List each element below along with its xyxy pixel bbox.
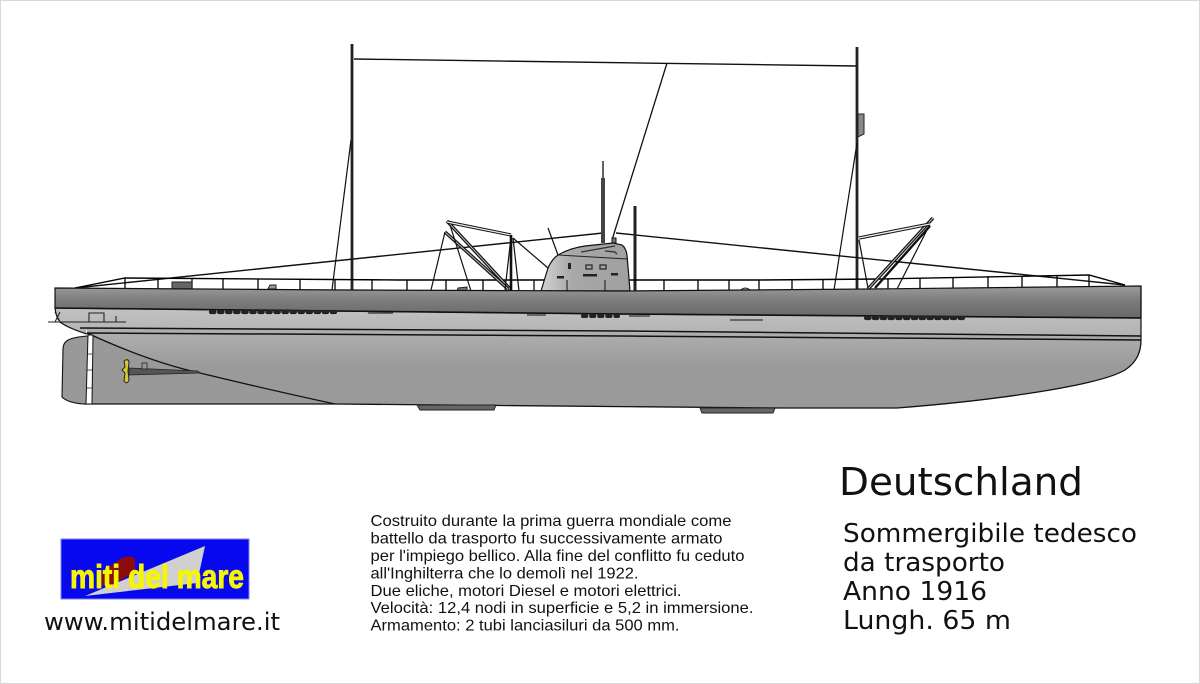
logo: miti del mare <box>61 539 249 599</box>
aft crane <box>859 218 933 289</box>
deck railing <box>75 275 1125 291</box>
lower hull <box>87 328 1141 408</box>
description text: Due eliche, motori Diesel e motori elettrici. <box>370 583 682 600</box>
icon: propeller <box>122 360 129 383</box>
logo: miti del mare: miti del mare <box>70 558 244 595</box>
rigging and masts <box>75 44 1125 291</box>
description text <box>370 513 754 634</box>
website address: www.mitidelmare.it <box>44 608 280 636</box>
portholes aft <box>866 316 963 320</box>
description text: all'Inghilterra che lo demolì nel 1922. <box>370 566 638 582</box>
hull lines <box>55 286 1141 340</box>
keel fins <box>417 405 775 413</box>
rudder post <box>83 335 98 404</box>
description text: per l'impiego bellico. Alla fine del conflitto fu ceduto <box>370 548 745 565</box>
light band <box>55 308 1141 336</box>
conning tower <box>534 238 630 291</box>
upper hull band <box>55 286 1141 318</box>
bow fittings <box>48 312 126 322</box>
title: Deutschland <box>839 460 1083 504</box>
portholes midships <box>583 314 618 318</box>
forward crane <box>431 221 548 291</box>
description text: Velocità: 12,4 nodi in superficie e 5,2 in immersione. <box>370 600 754 617</box>
specifications: da trasporto <box>843 548 1005 578</box>
specifications: Sommergibile tedesco <box>843 519 1137 549</box>
description text: Costruito durante la prima guerra mondiale come <box>370 513 732 530</box>
deck fittings <box>172 282 751 291</box>
portholes forward <box>211 310 339 314</box>
description text: battello da trasporto fu successivamente armato <box>370 530 723 548</box>
specifications <box>843 519 1137 636</box>
mast platform <box>858 114 864 137</box>
stern lobe and rudder area <box>62 333 335 404</box>
specifications: Anno 1916 <box>843 577 987 607</box>
hull dashes <box>368 313 763 320</box>
specifications: Lungh. 65 m <box>843 606 1011 636</box>
submarine side profile <box>48 44 1141 413</box>
hull outlines <box>62 336 88 404</box>
description text: Armamento: 2 tubi lanciasiluri da 500 mm. <box>370 618 680 634</box>
propeller shaft <box>129 363 200 375</box>
